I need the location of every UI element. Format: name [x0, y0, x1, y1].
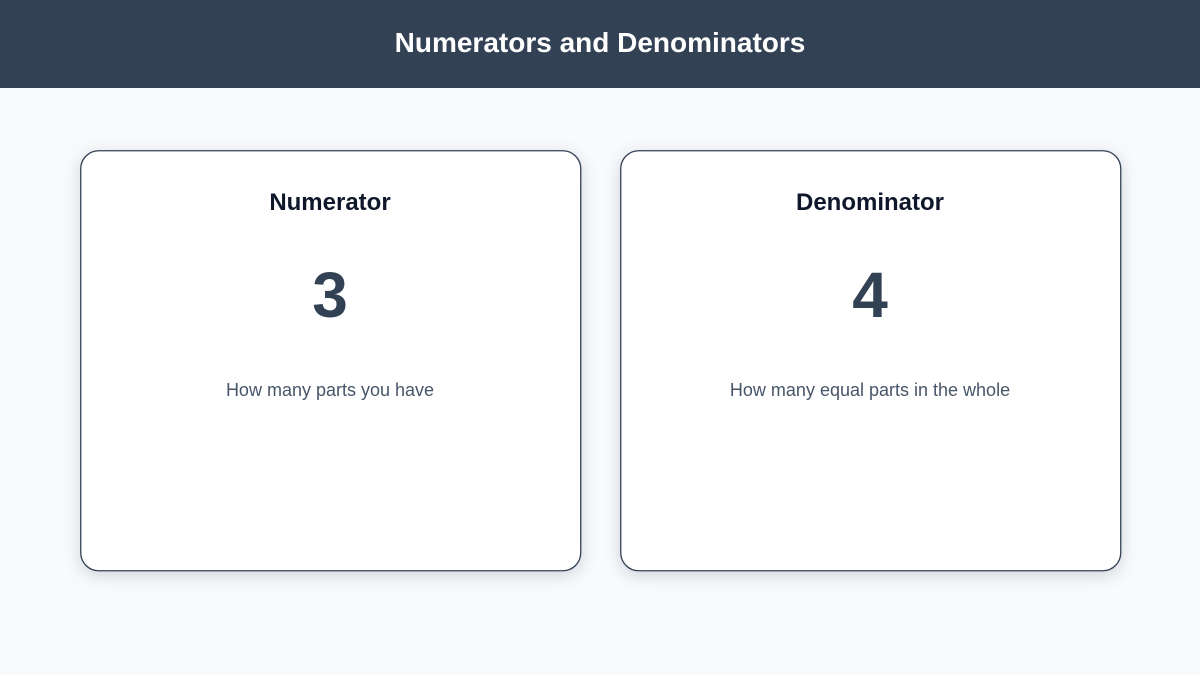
- panel: numerator: [74, 148, 588, 582]
- numerator heading: Numerator: [269, 189, 391, 216]
- title: Numerators and Denominators: [395, 27, 805, 58]
- denominator heading: Denominator: [796, 189, 944, 216]
- denominator description: How many equal parts in the whole: [730, 380, 1010, 400]
- numerator description: How many parts you have: [226, 380, 434, 400]
- numerator value: 3: [312, 259, 348, 331]
- header banner: [0, 0, 1200, 88]
- panel: denominator: [614, 148, 1128, 582]
- denominator value: 4: [852, 259, 888, 331]
